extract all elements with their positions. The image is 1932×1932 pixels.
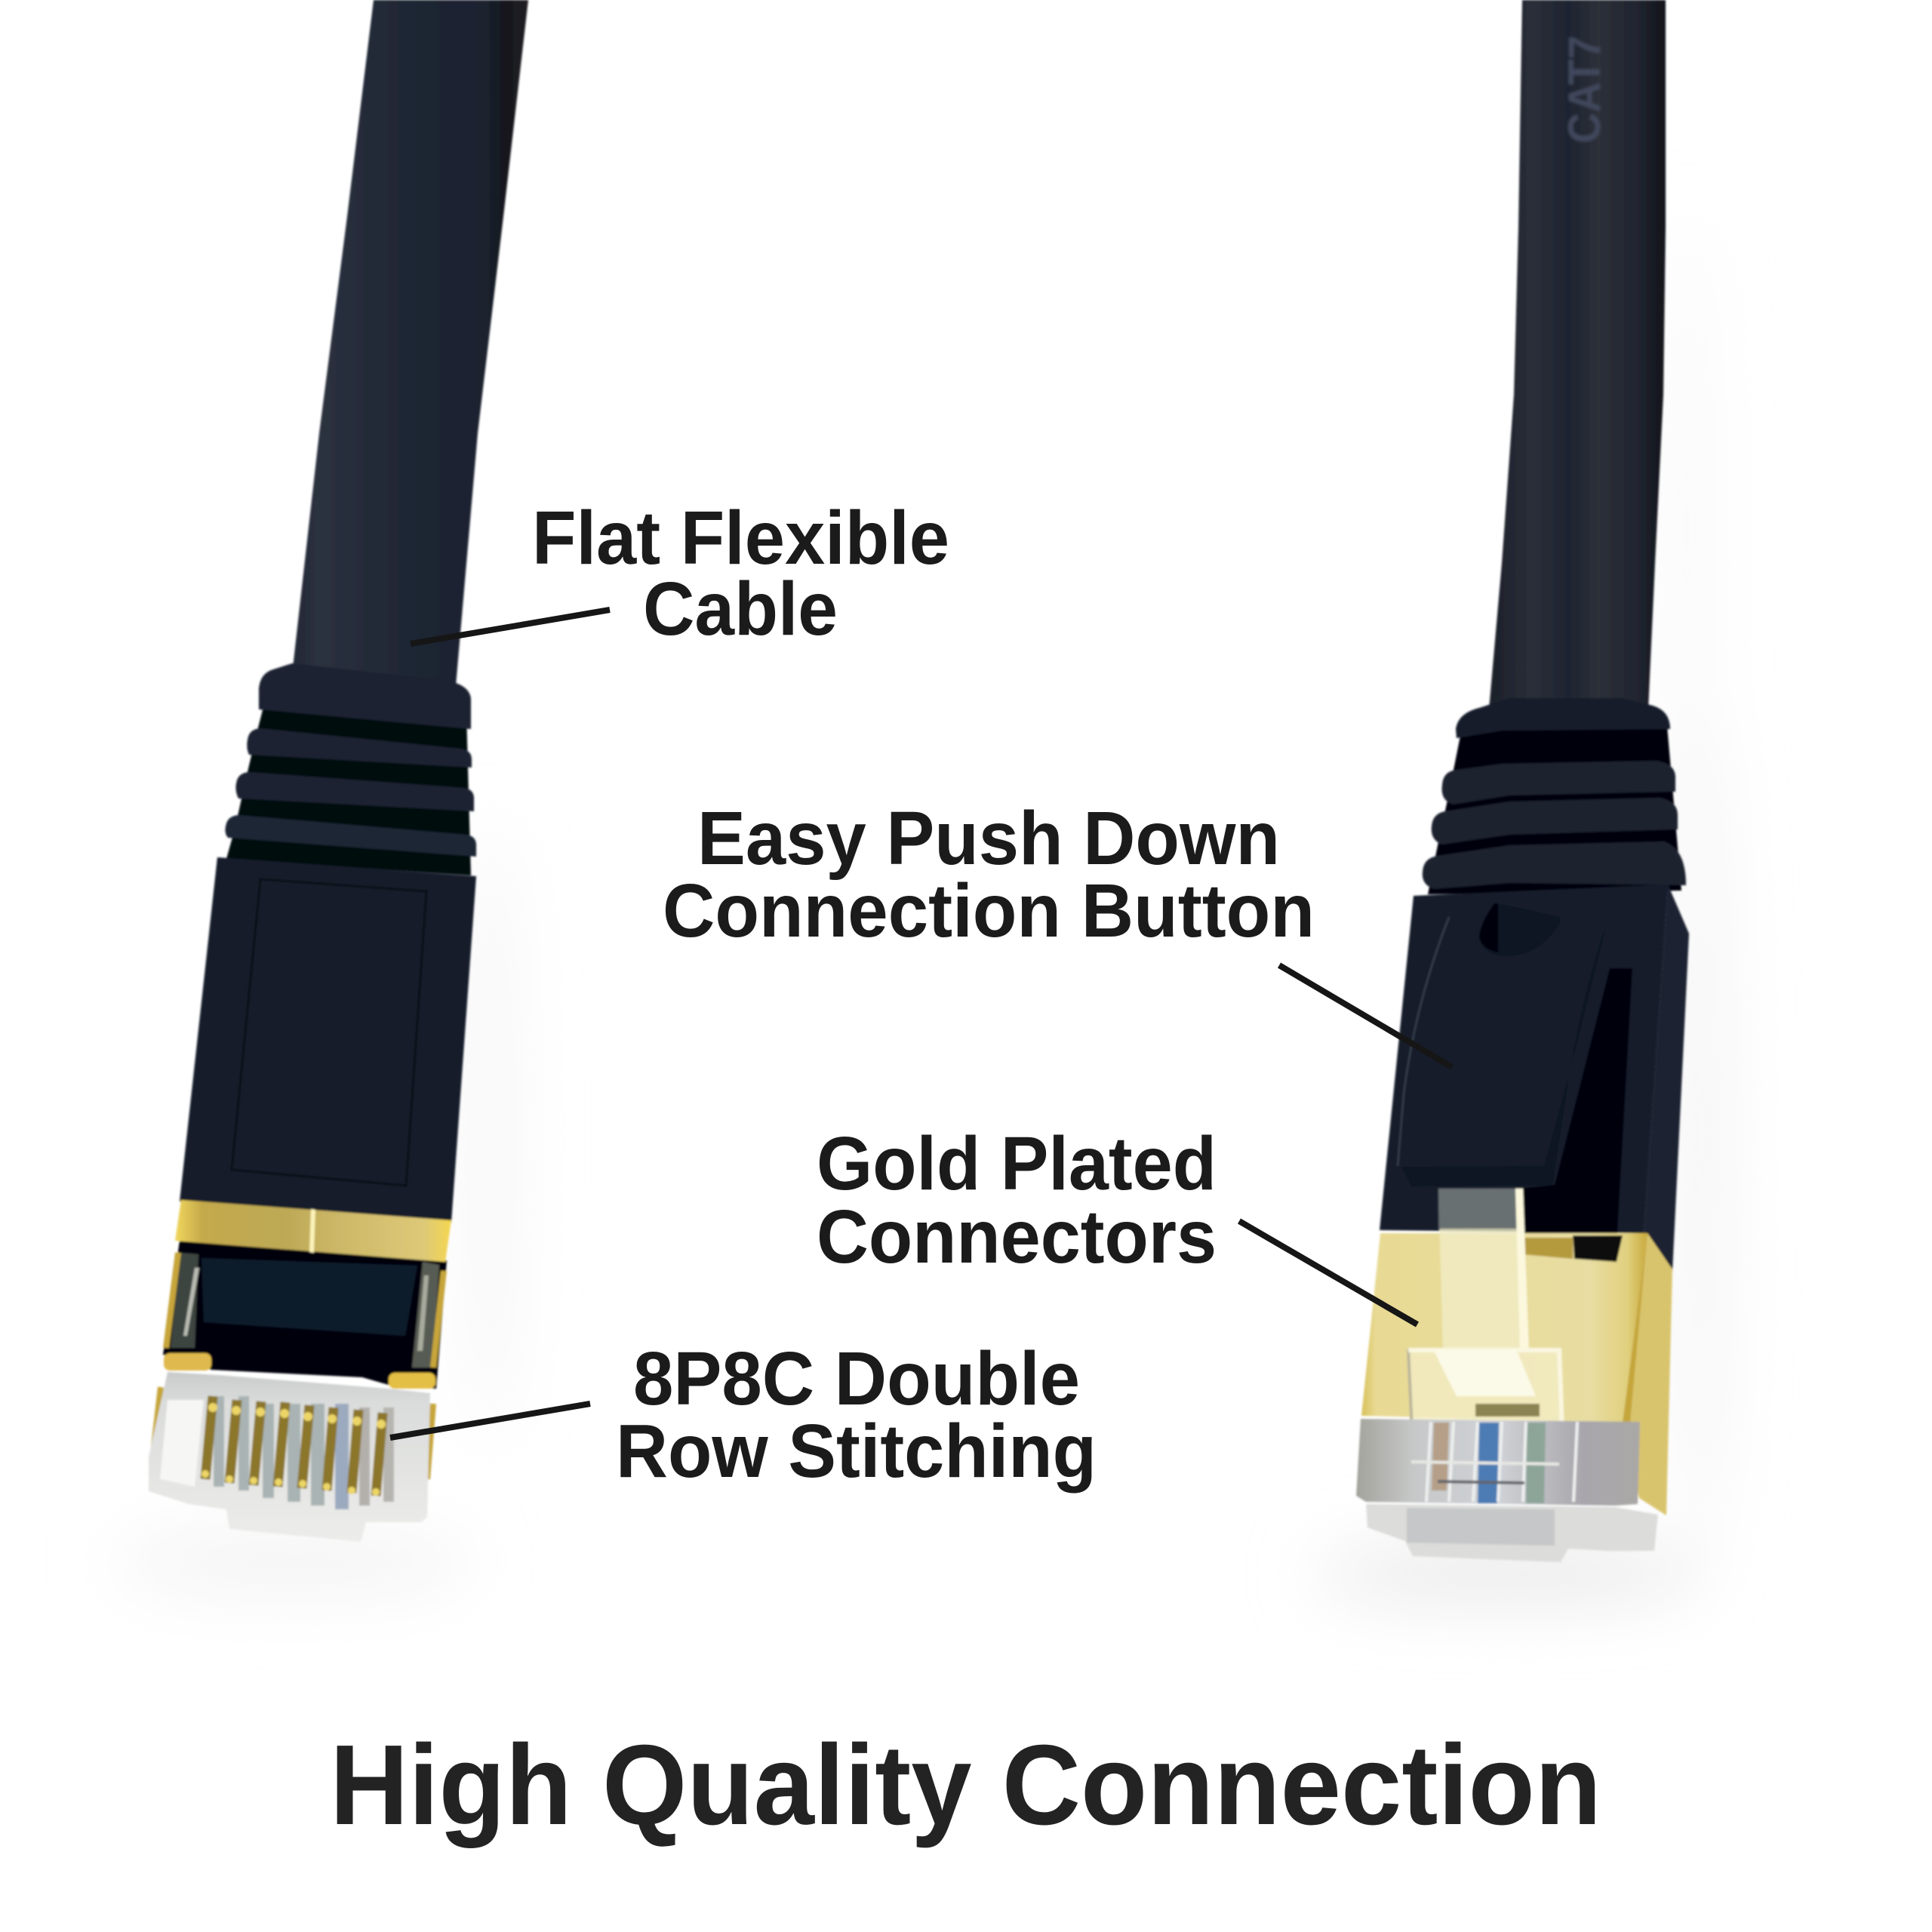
- right gold shield: [1361, 1233, 1672, 1515]
- callout: flat flexible cable: Cable: [643, 567, 838, 651]
- button front lip: [1401, 903, 1614, 1186]
- right clear plug face with wires: [1356, 1419, 1640, 1506]
- left strain relief boot: [225, 663, 476, 875]
- right connector side face: [1644, 884, 1689, 1272]
- left connector body: [180, 857, 476, 1223]
- button edge highlight: [1398, 917, 1449, 1166]
- left clear plug: [149, 1372, 430, 1542]
- soft surface shadows: [113, 211, 1723, 1601]
- left recessed latch: [202, 1258, 417, 1336]
- left flat cable: [290, 0, 528, 694]
- label text: 8P8C Double: [633, 1337, 1080, 1421]
- left dark shielded section: [163, 1241, 447, 1389]
- right clear plug upper frame: [1408, 1349, 1566, 1472]
- left side clear windows: [171, 1253, 439, 1367]
- label text: Easy Push Down: [697, 796, 1280, 881]
- title: High Quality Connection: [330, 1721, 1601, 1848]
- right cable connector: [1356, 0, 1689, 1562]
- callout: connection button: Connection Button: [663, 869, 1315, 953]
- left body recess panel: [232, 879, 426, 1186]
- plug moulded numbering: [1407, 1508, 1555, 1546]
- callout: connection button: [663, 796, 1452, 1067]
- right black latch slot: [1517, 968, 1632, 1233]
- cable print CAT7: CAT7: [1559, 35, 1610, 143]
- leader line: [390, 1404, 590, 1438]
- leader line: [1239, 1221, 1417, 1324]
- push down connection button: [1398, 895, 1614, 1189]
- callout: gold plated connectors: Connectors: [817, 1195, 1217, 1279]
- left plug clear highlight: [160, 1400, 204, 1487]
- callout: 8P8C double row stitching: [390, 1337, 1097, 1494]
- right connector body: [1380, 884, 1668, 1233]
- left contact guides: [214, 1396, 394, 1509]
- right strain relief boot: [1423, 698, 1686, 894]
- left cable connector: [149, 0, 528, 1542]
- eight gold contact pins: [202, 1396, 386, 1496]
- label text: Flat Flexible: [532, 496, 949, 580]
- callout: flat flexible cable: [411, 496, 949, 651]
- right clear plug lower lip: [1366, 1504, 1658, 1562]
- left gold shield band: [175, 1200, 451, 1262]
- leader line: [1279, 965, 1452, 1067]
- label text: Gold Plated: [817, 1121, 1217, 1206]
- callout: gold plated connectors: [817, 1121, 1417, 1324]
- right flat cable: [1489, 0, 1666, 709]
- left gold side rails: [153, 1253, 444, 1479]
- callout: 8P8C double row stitching: Row Stitching: [616, 1409, 1097, 1494]
- leader line: [411, 610, 610, 644]
- right clear release tab: [1438, 1189, 1529, 1351]
- left gold tabs: [164, 1353, 435, 1389]
- button finger hole: [1479, 903, 1560, 956]
